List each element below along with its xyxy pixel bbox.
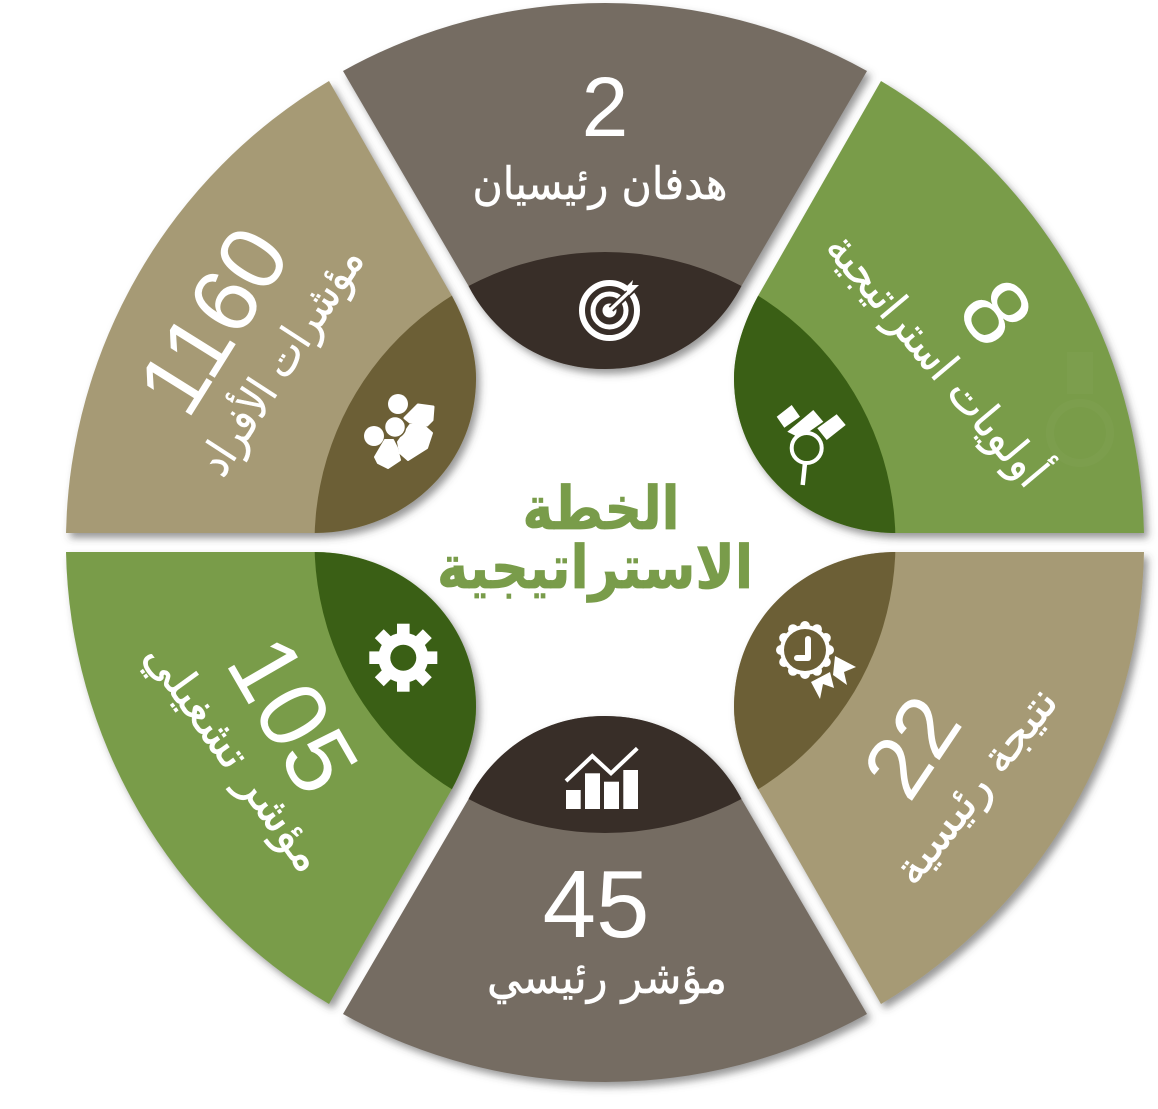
bottom right segment shape — [734, 552, 1144, 1004]
panel: bottom left segment, operational indicators — [66, 552, 476, 1004]
label: strategic priorities: أولويات استراتيجية — [815, 220, 1061, 498]
bottom segment shape — [343, 716, 867, 1082]
number: 45: 45 — [543, 851, 649, 958]
label: key indicator: مؤشر رئيسي — [487, 951, 727, 1004]
bottom segment inner dark area — [468, 716, 742, 833]
faint magnifier watermark — [1050, 352, 1110, 463]
icon: target with arrow — [582, 280, 639, 338]
panel: bottom segment, key indicators — [343, 716, 867, 1082]
icon: award badge with clock — [776, 621, 856, 699]
panel: top right segment, strategic priorities — [734, 81, 1144, 533]
label: operational indicator: مؤشر تشغيلي — [134, 631, 336, 882]
number: 105: 105 — [206, 619, 379, 811]
title line 2: الاستراتيجية — [437, 533, 753, 603]
title: strategic plan — [437, 474, 753, 603]
bottom left segment shape — [66, 552, 476, 1004]
bottom left segment inner dark area — [314, 552, 476, 790]
top left segment shape — [66, 81, 476, 533]
panel: top segment, two main goals — [343, 3, 867, 369]
label: key results: نتيجة رئيسية — [881, 676, 1069, 895]
panel: top left segment, individual indicators — [66, 81, 476, 533]
top right segment inner dark area — [734, 296, 896, 533]
icon: gear — [369, 624, 437, 692]
label: individual indicators: مؤشرات الأفراد — [186, 235, 374, 485]
icon: bar chart with trend line — [566, 748, 638, 809]
icon: group of people — [364, 394, 433, 468]
panel: bottom right segment, key results — [734, 552, 1144, 1004]
top right segment shape — [734, 81, 1144, 533]
label: two main goals: هدفان رئيسيان — [472, 157, 728, 210]
bottom right segment inner dark area — [734, 552, 896, 790]
top left segment inner dark area — [314, 296, 476, 533]
number: 8: 8 — [939, 260, 1054, 365]
number: 22: 22 — [843, 678, 980, 815]
top segment inner dark area — [468, 252, 742, 369]
top segment shape — [343, 3, 867, 369]
number: 1160: 1160 — [118, 210, 309, 432]
number: 2: 2 — [582, 60, 628, 154]
title line 1: الخطة — [522, 474, 680, 544]
icon: magnifier over bars — [777, 405, 846, 485]
